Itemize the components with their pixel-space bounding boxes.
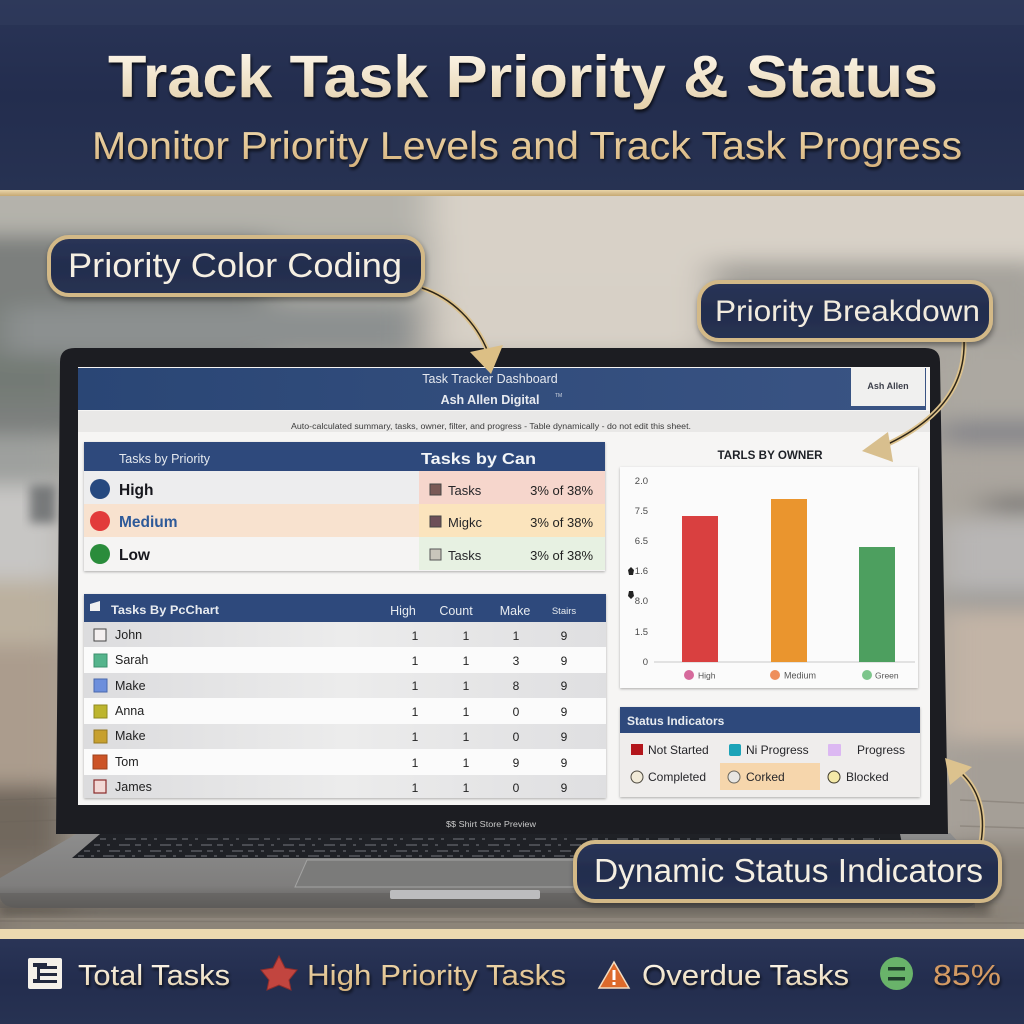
dashboard header	[78, 368, 926, 410]
row: Make: 1	[412, 679, 419, 693]
row: Make: 1	[463, 679, 470, 693]
status header: Status Indicators	[627, 714, 725, 728]
label: percent: 85%	[933, 960, 1001, 992]
row: James: 1	[463, 781, 470, 795]
icon: star	[261, 956, 297, 990]
status header	[620, 707, 920, 733]
row: Tom	[84, 749, 606, 775]
subtitle: Monitor Priority Levels and Track Task Progress	[92, 125, 962, 168]
blurred office background	[0, 150, 1024, 946]
row: high: Tasks	[448, 483, 482, 498]
row: low: 3% of 38%	[530, 548, 593, 563]
row: Make 2: 1	[463, 730, 470, 744]
logo box	[851, 368, 925, 406]
row: low: Low	[119, 547, 151, 564]
row: Anna: Anna	[115, 704, 144, 718]
dashboard header: Task Tracker Dashboard	[422, 372, 558, 386]
arrow: priority color coding	[422, 288, 503, 374]
status row 1: Ni Progress	[746, 743, 809, 757]
header band	[0, 0, 1024, 196]
status row 2: Completed	[648, 770, 706, 784]
row: Sarah: 9	[561, 654, 568, 668]
laptop bezel	[56, 348, 948, 834]
icon: warning triangle	[599, 962, 629, 988]
arrow: priority breakdown	[862, 340, 964, 462]
row: Sarah	[84, 647, 606, 673]
row: Sarah: 1	[412, 654, 419, 668]
row: Make 2	[84, 724, 606, 749]
chart legend: Medium	[784, 670, 816, 680]
row: James: James	[115, 780, 152, 794]
laptop base	[0, 829, 975, 908]
row: Sarah: 1	[463, 654, 470, 668]
dark background block	[30, 485, 56, 523]
row: high: High	[119, 482, 153, 499]
auto-calculated note: Auto-calculated summary, tasks, owner, filter, and progress - Table dynamically - do not edit this sheet.	[291, 422, 691, 431]
title: Track Task Priority & Status	[108, 44, 938, 110]
status row 1	[631, 743, 905, 757]
callout: dynamic status indicators: Dynamic Status Indicators	[594, 852, 983, 889]
y axis labels: 0	[643, 657, 648, 668]
auto-calculated note	[78, 411, 930, 432]
row: James: 9	[561, 781, 568, 795]
row: Make 2: Make	[115, 729, 146, 743]
row: Tom: 1	[463, 756, 470, 770]
y axis labels	[635, 476, 648, 668]
row: high	[84, 471, 605, 504]
row: John	[84, 622, 606, 647]
row: Sarah: 3	[513, 654, 520, 668]
arrow: dynamic status	[945, 758, 982, 842]
table header	[84, 594, 606, 622]
status row 2: Blocked	[846, 770, 889, 784]
row: Tom: 1	[412, 756, 419, 770]
row: Anna: 9	[561, 705, 568, 719]
dashboard header: Ash Allen Digital	[441, 393, 539, 407]
y axis labels: 6.5	[635, 536, 648, 547]
bar chart	[620, 467, 918, 688]
row: Make: 9	[561, 679, 568, 693]
chart legend: High	[698, 670, 716, 680]
row: Make	[84, 673, 606, 698]
chart legend: Green	[875, 670, 899, 680]
row: James: 0	[513, 781, 520, 795]
status row 2	[631, 770, 889, 784]
row: John: 1	[412, 629, 419, 643]
row: Make 2: 9	[561, 730, 568, 744]
row: Anna	[84, 698, 606, 724]
status cell highlight	[720, 763, 820, 790]
row: Anna: 1	[463, 705, 470, 719]
status row 1: Progress	[857, 743, 905, 757]
label: high priority tasks: High Priority Tasks	[307, 960, 566, 992]
row: John: 1	[463, 629, 470, 643]
row: Make: Make	[115, 679, 146, 693]
table header: Tasks By PcChart	[111, 603, 219, 617]
y axis labels: 2.0	[635, 476, 648, 487]
row: Make: 8	[513, 679, 520, 693]
logo box: Ash Allen	[867, 381, 909, 391]
row: Tom: Tom	[115, 755, 139, 769]
row: John: 9	[561, 629, 568, 643]
row: high: 3% of 38%	[530, 483, 593, 498]
label: total tasks: Total Tasks	[78, 960, 230, 992]
table header: Count	[439, 604, 473, 618]
callout: priority breakdown	[699, 282, 991, 340]
row: Tom: 9	[561, 756, 568, 770]
laptop	[0, 348, 975, 908]
row: James: 1	[412, 781, 419, 795]
row: Anna: 0	[513, 705, 520, 719]
label: overdue tasks: Overdue Tasks	[642, 960, 849, 992]
priority panel header: Tasks by Priority	[119, 452, 211, 466]
callout: priority color coding	[49, 237, 423, 295]
status row 2: Corked	[746, 770, 785, 784]
row: James	[84, 775, 606, 798]
panel: tasks by priority	[84, 442, 605, 571]
table header: High	[390, 604, 416, 618]
row: medium: Medium	[119, 514, 178, 531]
row: John: 1	[513, 629, 520, 643]
row: Anna: 1	[412, 705, 419, 719]
row: low	[84, 537, 605, 570]
screen	[78, 367, 930, 805]
y axis labels: 8.0	[635, 596, 648, 607]
footer band	[0, 929, 1024, 1024]
bar: low	[859, 547, 895, 662]
row: medium	[84, 504, 605, 537]
row: Make 2: 1	[412, 730, 419, 744]
bezel caption: $$ Shirt Store Preview	[446, 819, 537, 829]
row: Sarah: Sarah	[115, 653, 148, 667]
y axis labels: 1.5	[635, 627, 648, 638]
table: tasks by owner	[84, 594, 606, 798]
row: Tom: 9	[513, 756, 520, 770]
row: Make 2: 0	[513, 730, 520, 744]
row: John: John	[115, 628, 142, 642]
bar: medium	[771, 499, 807, 662]
status row 1: Not Started	[648, 743, 709, 757]
y axis labels: 1.6	[635, 566, 648, 577]
table header: Make	[500, 604, 530, 618]
icon: green badge	[880, 957, 913, 990]
y axis marker	[628, 567, 634, 599]
callout: dynamic status indicators	[575, 842, 1000, 901]
bar: high	[682, 516, 718, 662]
chart title: TARLS BY OWNER	[718, 450, 823, 462]
dashboard header: TM	[555, 393, 562, 399]
panel: status indicators	[620, 707, 920, 797]
row: medium: Migkc	[448, 515, 482, 530]
priority panel header: Tasks by Can	[421, 451, 536, 468]
priority panel header	[84, 442, 605, 471]
chart legend	[684, 670, 899, 680]
y axis labels: 7.5	[635, 506, 648, 517]
row: low: Tasks	[448, 548, 482, 563]
callout: priority breakdown: Priority Breakdown	[715, 295, 980, 328]
table header: Stairs	[552, 606, 576, 617]
callout: priority color coding: Priority Color Coding	[68, 247, 402, 285]
row: medium: 3% of 38%	[530, 515, 593, 530]
icon: total tasks	[28, 958, 62, 989]
